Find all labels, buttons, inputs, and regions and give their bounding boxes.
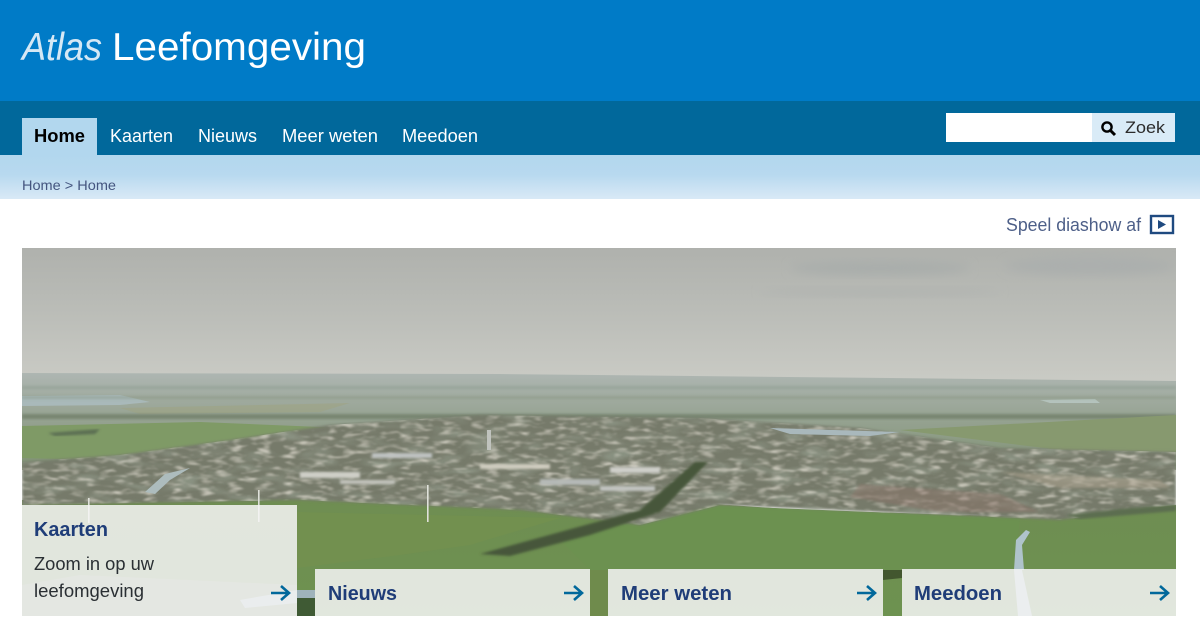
tree line and canal — [22, 462, 1176, 616]
panel heading: Meedoen: Meedoen — [914, 583, 1002, 605]
distant landscape — [22, 373, 1176, 470]
sky — [22, 248, 1176, 383]
foreground fields — [22, 495, 1176, 616]
search box — [946, 113, 1175, 142]
panel: Meedoen — [902, 569, 1176, 616]
nav link: Nieuws: Nieuws — [198, 126, 257, 146]
icon: play button — [1151, 216, 1173, 233]
header bar — [0, 0, 1200, 101]
town — [22, 415, 1176, 525]
panel: Kaarten — [22, 505, 297, 616]
panel: Meer weten — [608, 569, 883, 616]
panel heading: Nieuws: Nieuws — [328, 583, 397, 605]
nav link: Meer weten: Meer weten — [282, 126, 378, 146]
title: Atlas Leefomgeving: Atlas — [20, 26, 102, 69]
nav link: Meedoen: Meedoen — [402, 126, 478, 146]
nav link: Kaarten: Kaarten — [110, 126, 173, 146]
search button label: Zoek — [1125, 118, 1166, 137]
icon: arrow — [1150, 586, 1168, 600]
panel: Nieuws — [315, 569, 590, 616]
icon: magnifier — [1102, 122, 1115, 135]
icon: arrow — [564, 586, 582, 600]
slideshow control: Speel diashow af — [1006, 215, 1142, 235]
navigation bar — [0, 101, 1200, 155]
hero photo: aerial view of town and fields — [22, 248, 1176, 616]
active tab: Home — [22, 118, 97, 155]
breadcrumb band — [0, 155, 1200, 199]
panel text — [34, 554, 155, 601]
panel text: leefomgeving — [34, 581, 144, 601]
title: Atlas Leefomgeving: Leefomgeving — [112, 26, 366, 69]
panel text: Zoom in op uw — [34, 554, 155, 574]
panel heading: Meer weten: Meer weten — [621, 583, 732, 605]
wind turbines — [88, 485, 429, 523]
active tab: Home: Home — [34, 126, 85, 146]
icon: arrow — [857, 586, 875, 600]
icon: arrow — [271, 586, 289, 600]
panel heading: Kaarten: Kaarten — [34, 519, 108, 541]
breadcrumb band: Home > Home — [22, 177, 116, 193]
